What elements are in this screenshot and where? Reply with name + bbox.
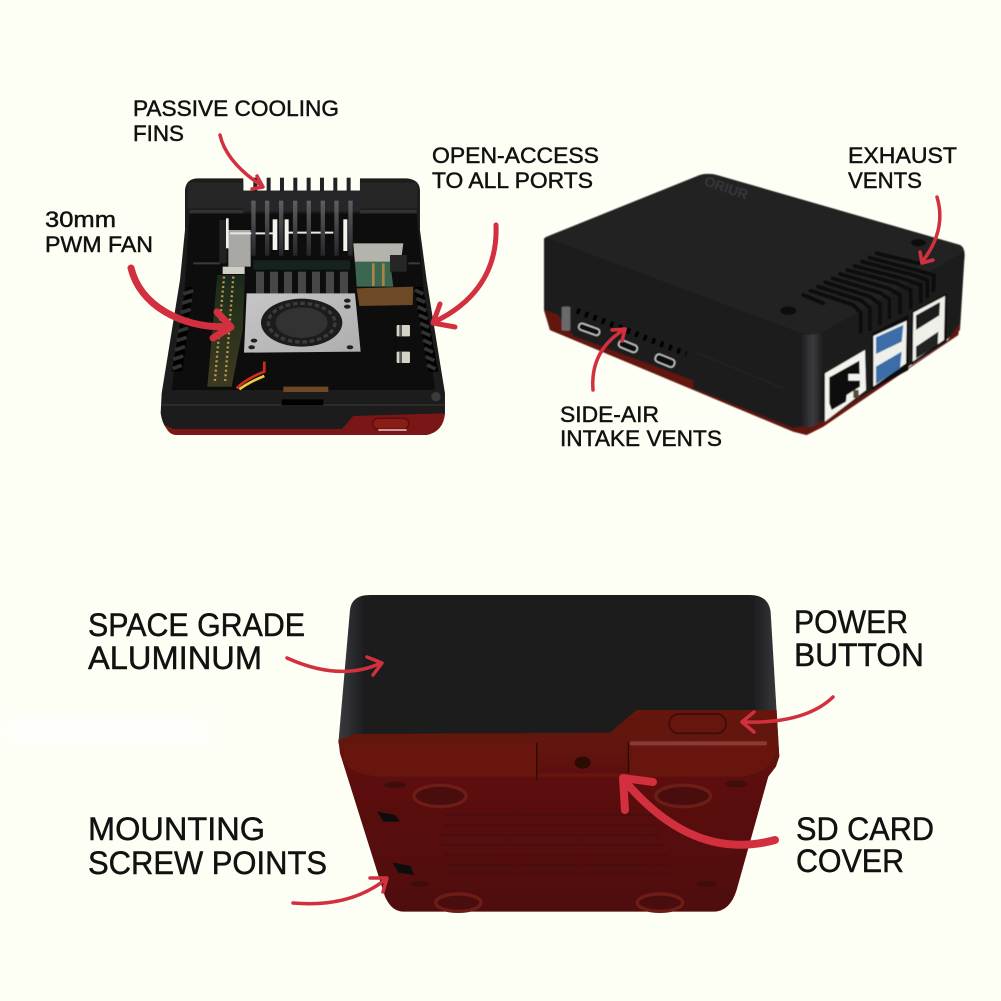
white haze band [0,718,215,744]
ethernet port [825,350,866,422]
USB blue [872,315,908,390]
arrow: passive cooling fins [220,135,263,189]
heading: passive cooling fins: FINS [133,121,184,146]
side air vents [577,311,687,354]
heatsink [243,191,361,211]
heading: mounting screw points: MOUNTING [88,811,265,847]
heading: power button [794,604,924,673]
heading: exhaust vents [848,143,957,193]
heading: sd card cover: SD CARD [796,811,934,847]
product: closed case angled [544,173,965,435]
arrow: power button [742,697,833,732]
heading: mounting screw points [88,811,327,881]
arrow: 30mm fan [131,268,231,338]
USB black [912,293,947,365]
white gaps and horizontal rails [273,219,277,250]
heading: sd card cover: COVER [796,843,904,879]
power button [669,714,726,733]
product: case front and underside [338,595,779,912]
heading: side-air intake vents [560,402,722,451]
heading: pwm fan: 30mm [45,207,116,232]
product: open case with fan [161,178,445,435]
fan unit [243,352,362,385]
heading: pwm fan [45,207,153,257]
arrow: sd card cover [623,778,775,845]
heading: exhaust vents: VENTS [848,168,922,193]
arrow: space grade aluminum [287,657,382,675]
arrow: side-air intake vents [593,329,625,390]
left board and GPIO [228,230,251,267]
heading: space grade aluminum: ALUMINUM [88,640,262,676]
heading: space grade aluminum [88,607,305,676]
heading: space grade aluminum: SPACE GRADE [88,607,305,643]
arrow: exhaust vents [920,197,940,263]
heading: power button: POWER [794,604,908,640]
heading: power button: BUTTON [794,637,924,673]
arrow: open-access ports [433,225,496,327]
arrow: mounting screw points [293,878,387,904]
side slots [377,812,400,822]
heading: sd card cover [796,811,934,879]
heading: exhaust vents: EXHAUST [848,143,957,168]
vents [414,287,438,372]
heading: passive cooling fins [133,96,339,146]
mounting bosses [414,785,711,911]
heading: passive cooling fins: PASSIVE COOLING [133,96,339,121]
heading: open-access: OPEN-ACCESS [432,143,599,168]
heading: open-access [432,143,599,193]
connectors [397,325,410,336]
power button [373,418,409,429]
exhaust vent fins [803,253,934,332]
heading: side-air intake vents: SIDE-AIR [560,402,659,427]
screw holes [780,306,796,315]
logo: ORIUR [702,173,750,203]
vent lines [440,815,673,873]
heading: side-air intake vents: INTAKE VENTS [560,426,722,451]
heading: mounting screw points: SCREW POINTS [88,845,327,881]
heading: pwm fan: PWM FAN [45,232,153,257]
right board [353,243,403,263]
side ports [578,323,676,368]
heading: open-access: TO ALL PORTS [432,168,593,193]
